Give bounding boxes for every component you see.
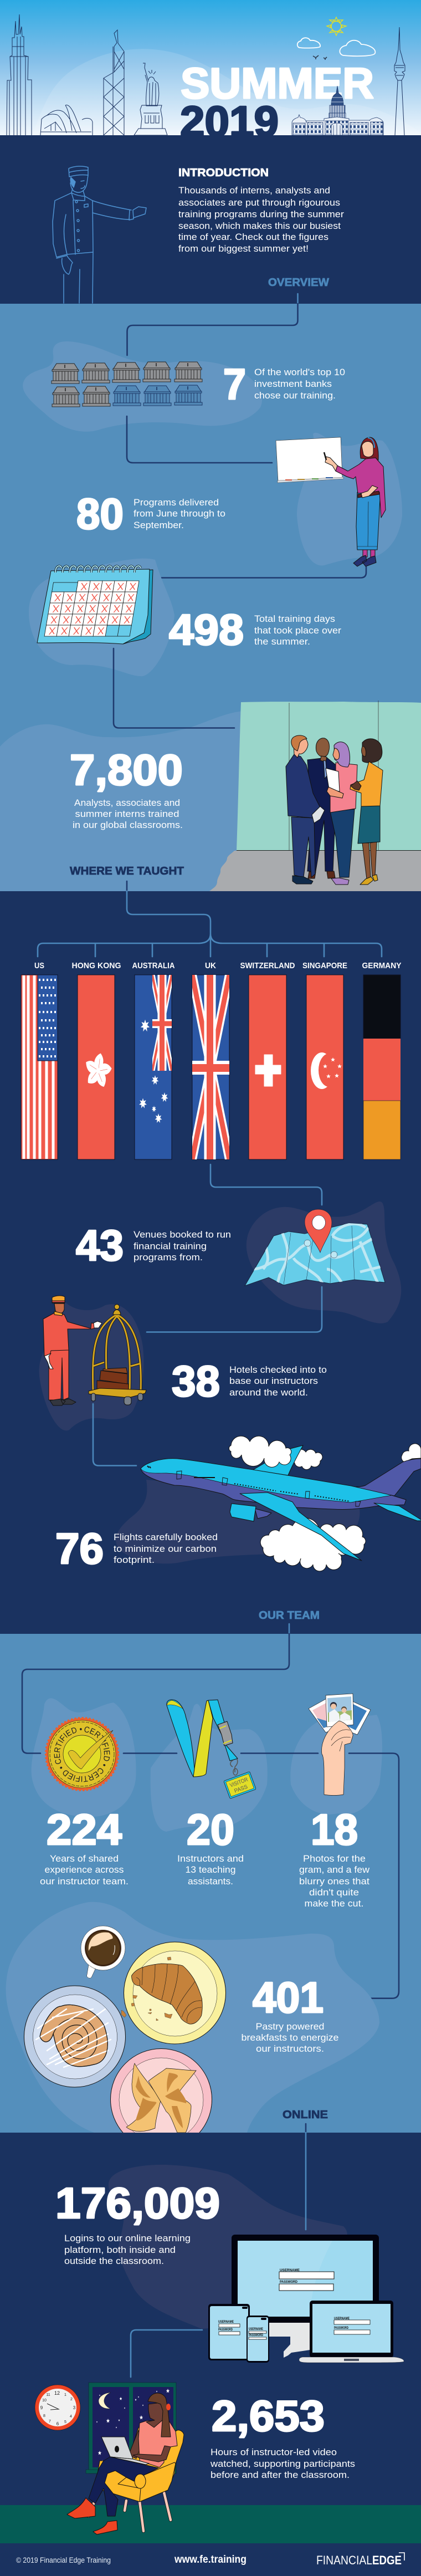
icon: wall clock: 8 bbox=[43, 2414, 45, 2418]
stat: 224 years bbox=[40, 1805, 129, 1887]
stat: 76 flights: 76 bbox=[55, 1524, 104, 1573]
text block: introduction body: associates are put through rigourous bbox=[178, 197, 340, 208]
stat: 7 banks bbox=[223, 360, 345, 408]
stat: 401 breakfasts bbox=[242, 1973, 339, 2054]
blob behind map bbox=[247, 1202, 401, 1323]
cloud behind fin bbox=[294, 1449, 322, 1470]
illustration: bellhop outline bbox=[53, 166, 146, 303]
connector: devices to study scene bbox=[131, 2330, 202, 2377]
stat: 18 photos: blurry ones that bbox=[299, 1876, 369, 1887]
green floor band bbox=[0, 2505, 421, 2543]
laptop logo bbox=[115, 2446, 119, 2452]
stat: 224 years: our instructor team. bbox=[40, 1876, 129, 1887]
stat: 7 banks: investment banks bbox=[254, 379, 332, 389]
student forearm bbox=[133, 2446, 171, 2462]
icon: hand holding photos bbox=[309, 1694, 371, 1796]
icon: clouds outlines bbox=[297, 38, 375, 56]
blob behind bellhop bbox=[39, 1302, 143, 1430]
text block: introduction body: training programs during the summer bbox=[178, 209, 344, 219]
stat: 20 instructors: Instructors and bbox=[177, 1853, 244, 1864]
stat: 38 hotels: around the world. bbox=[229, 1387, 308, 1398]
luggage bbox=[97, 1368, 129, 1393]
blob behind online stat bbox=[109, 2165, 347, 2329]
wing fin bbox=[253, 1445, 303, 1475]
icon: wall clock: 5 bbox=[64, 2420, 66, 2424]
heading: online: ONLINE bbox=[283, 2109, 328, 2121]
stat: 176,009 logins bbox=[55, 2179, 220, 2266]
stat: 7 banks: 7 bbox=[223, 360, 246, 408]
stat: 76 flights: Flights carefully booked bbox=[114, 1532, 218, 1542]
blob behind calendar bbox=[29, 559, 174, 676]
chair arm roll bbox=[135, 2474, 146, 2488]
icon: coffee cup bbox=[81, 1926, 125, 1978]
blob behind teacher bbox=[297, 433, 402, 565]
stat: 7,800 people trained: Analysts, associates and bbox=[74, 798, 180, 808]
stat: 80 programs: September. bbox=[134, 520, 184, 530]
stat: 2,653 hours: 2,653 bbox=[212, 2391, 325, 2440]
footer website: www.fe.training bbox=[174, 2554, 247, 2565]
connector: banks to whiteboard bbox=[127, 416, 272, 463]
stat: 38 hotels: 38 bbox=[172, 1357, 220, 1405]
stat: 7,800 people trained bbox=[70, 745, 183, 830]
stat: 38 hotels: base our instructors bbox=[229, 1376, 318, 1386]
stat: 2,653 hours: watched, supporting participants bbox=[210, 2459, 355, 2469]
icon: lanyard and visitor pass: VISITOR bbox=[229, 1777, 249, 1789]
stat: 18 photos: didn't quite bbox=[309, 1887, 359, 1898]
blobs behind team icons bbox=[32, 1698, 382, 1832]
heading: where we taught: WHERE WE TAUGHT bbox=[70, 865, 184, 877]
tablet left bbox=[208, 2304, 250, 2360]
stat: 176,009 logins: outside the classroom. bbox=[64, 2256, 164, 2266]
country labels: HONG KONG bbox=[72, 961, 121, 970]
icon: Capitol building bbox=[292, 86, 383, 135]
logo: Financial Edge: FINANCIAL bbox=[316, 2553, 372, 2567]
stat: 224 years: Years of shared bbox=[50, 1853, 119, 1864]
icon: birds bbox=[313, 55, 327, 60]
engine nacelle bbox=[230, 1504, 256, 1521]
text block: introduction body bbox=[178, 185, 344, 254]
chair legs fill bbox=[89, 2492, 171, 2531]
stat: 20 instructors bbox=[177, 1805, 244, 1887]
stat: 43 venues bbox=[76, 1221, 231, 1270]
country labels: SINGAPORE bbox=[302, 961, 347, 970]
logo: Financial Edge bbox=[316, 2553, 404, 2567]
tablet left: PASSWORD bbox=[218, 2328, 233, 2332]
person: man in dark suit at back bbox=[307, 738, 336, 878]
stat: 2,653 hours: Hours of instructor-led video bbox=[210, 2447, 337, 2457]
connector: online to devices bbox=[305, 2124, 306, 2230]
illustration: map with pin bbox=[245, 1209, 385, 1286]
icon: wall clock: 7 bbox=[49, 2420, 51, 2424]
icon: certified badge bbox=[45, 1717, 119, 1791]
country labels: US bbox=[34, 961, 44, 970]
stat: 224 years: experience across bbox=[44, 1864, 124, 1875]
stat: 76 flights: to minimize our carbon bbox=[114, 1543, 217, 1554]
stat: 80 programs: Programs delivered bbox=[134, 497, 219, 508]
illustration: airplane with clouds bbox=[141, 1436, 421, 1571]
blob behind plane bbox=[116, 1480, 360, 1563]
icon: wall clock: 6 bbox=[57, 2421, 59, 2426]
icon: certified badge: CERTIFIED • CERTIFIED • CERTIFIED • bbox=[54, 1727, 110, 1782]
icon: night window bbox=[86, 2383, 176, 2473]
footer copyright: © 2019 Financial Edge Training bbox=[16, 2556, 111, 2564]
stat: 20 instructors: 13 teaching bbox=[185, 1864, 236, 1875]
stat: 43 venues: 43 bbox=[76, 1221, 124, 1270]
title: SUMMER: SUMMER bbox=[181, 59, 374, 108]
connector: calendar to classroom bbox=[114, 648, 234, 728]
heading: our team: OUR TEAM bbox=[259, 1609, 320, 1622]
illustration: devices bbox=[208, 2235, 404, 2363]
stat: 76 flights bbox=[55, 1524, 218, 1573]
icon: Munich TV tower bbox=[394, 27, 405, 135]
blob behind pastries bbox=[6, 1902, 379, 2133]
stat: 2,653 hours bbox=[210, 2391, 355, 2480]
connector: flags to map bbox=[210, 1164, 322, 1205]
stat: 498 training days: the summer. bbox=[254, 636, 310, 647]
cart frame bbox=[93, 1315, 141, 1392]
text block: introduction body: season, which makes this our busiest bbox=[178, 221, 341, 231]
icon: wall clock: 11 bbox=[46, 2393, 50, 2397]
country labels: UK bbox=[205, 961, 216, 970]
flag: US bbox=[21, 975, 58, 1159]
country labels bbox=[34, 961, 401, 970]
stat: 401 breakfasts: our instructors. bbox=[256, 2043, 324, 2054]
stat: 401 breakfasts: Pastry powered bbox=[256, 2021, 325, 2032]
laptop lid bbox=[101, 2437, 133, 2459]
laptop: PASSWORD bbox=[334, 2327, 348, 2330]
stat: 7 banks: chose our training. bbox=[254, 390, 336, 401]
stat: 224 years: 224 bbox=[47, 1805, 122, 1854]
stat: 2,653 hours: before and after the classroom. bbox=[210, 2470, 350, 2480]
stat: 498 training days: Total training days bbox=[254, 614, 335, 624]
sneaker right bbox=[93, 2521, 117, 2534]
title: 2019: 2019 bbox=[180, 97, 279, 146]
illustration: calendar bbox=[37, 566, 153, 644]
stat: 498 training days: that took place over bbox=[254, 625, 341, 636]
stat: 18 photos bbox=[299, 1805, 370, 1909]
fuselage lower bbox=[141, 1459, 406, 1509]
phone: USERNAME bbox=[249, 2328, 263, 2331]
tail fin bbox=[351, 1459, 421, 1496]
illustration: teacher bbox=[324, 437, 386, 566]
illustration: classroom scene bbox=[209, 701, 421, 891]
blob behind classroom stat bbox=[0, 711, 244, 891]
laptop: USERNAME bbox=[334, 2317, 350, 2321]
laptop bbox=[299, 2301, 404, 2363]
country labels: AUSTRALIA bbox=[132, 961, 175, 970]
student hair and braid bbox=[148, 2393, 171, 2437]
student face and neck bbox=[146, 2403, 164, 2427]
heading: overview: OVERVIEW bbox=[268, 277, 329, 289]
icon: Bank of China tower bbox=[104, 30, 124, 135]
illustration: whiteboard bbox=[276, 437, 343, 483]
connector: overview to banks bbox=[127, 294, 298, 355]
chair back and seat bbox=[97, 2427, 184, 2502]
top cloud bbox=[229, 1436, 291, 1467]
icon grid: ten banks bbox=[52, 362, 202, 407]
chair arm bbox=[118, 2462, 176, 2502]
stat: 401 breakfasts: breakfasts to energize bbox=[242, 2032, 339, 2043]
stat: 20 instructors: assistants. bbox=[188, 1876, 233, 1887]
tail cloud bbox=[402, 1444, 421, 1462]
stat: 176,009 logins: 176,009 bbox=[55, 2179, 220, 2227]
connector: cart to plane bbox=[93, 1404, 136, 1465]
stat: 20 instructors: 20 bbox=[187, 1805, 234, 1854]
person: woman in orange top bbox=[350, 739, 383, 885]
person: woman in hijab bbox=[326, 742, 357, 885]
flag: UK bbox=[192, 975, 229, 1159]
text block: introduction body: time of year. Check out the figures bbox=[178, 232, 328, 242]
illustration: student on armchair bbox=[67, 2393, 184, 2534]
phone bbox=[247, 2316, 269, 2363]
text block: introduction body: from our biggest summer yet! bbox=[178, 243, 309, 254]
desktop stand bbox=[269, 2323, 310, 2358]
stat: 7,800 people trained: summer interns trained bbox=[75, 809, 179, 819]
stat: 80 programs: from June through to bbox=[134, 508, 225, 519]
student jeans bbox=[89, 2457, 158, 2516]
icon: lanyard and visitor pass: PASS bbox=[233, 1784, 249, 1795]
connector tree: where we taught to flags bbox=[38, 881, 382, 957]
laptop base bbox=[110, 2457, 149, 2465]
country labels: SWITZERLAND bbox=[240, 961, 295, 970]
blob behind banks bbox=[23, 341, 262, 432]
sneaker left bbox=[67, 2498, 95, 2518]
desktop monitor: USERNAME bbox=[280, 2269, 300, 2272]
icon: wall clock: 12 bbox=[54, 2390, 60, 2396]
icon: croissant plate bbox=[121, 1942, 226, 2044]
stat: 18 photos: Photos for the bbox=[303, 1853, 366, 1864]
phone: PASSWORD bbox=[249, 2334, 263, 2337]
icon: wall clock: 10 bbox=[42, 2399, 47, 2403]
flag: Singapore bbox=[306, 975, 343, 1159]
text block: introduction body: Thousands of interns, analysts and bbox=[178, 185, 330, 196]
engine bbox=[255, 1509, 271, 1519]
stat: 38 hotels: Hotels checked into to bbox=[229, 1364, 327, 1375]
stat: 43 venues: financial training bbox=[134, 1241, 207, 1251]
icon: wall clock: 3 bbox=[73, 2405, 76, 2410]
icon: cinnamon roll plate bbox=[24, 1986, 125, 2087]
stat: 498 training days bbox=[169, 605, 341, 654]
stat: 7 banks: Of the world's top 10 bbox=[254, 367, 345, 377]
icon: wall clock bbox=[35, 2385, 80, 2430]
lower cloud bbox=[260, 1518, 366, 1571]
flag: Hong Kong bbox=[78, 975, 115, 1159]
tablet left: USERNAME bbox=[218, 2321, 234, 2324]
desktop monitor: PASSWORD bbox=[280, 2281, 298, 2284]
icon: wall clock: 1 bbox=[64, 2393, 66, 2397]
stat: 18 photos: 18 bbox=[311, 1805, 358, 1854]
icon: lanyard and visitor pass bbox=[167, 1700, 256, 1799]
country labels: GERMANY bbox=[362, 961, 401, 970]
student left arm bbox=[129, 2430, 142, 2459]
person: man in blue suit bbox=[286, 735, 325, 884]
logo: Financial Edge: EDGE bbox=[372, 2553, 402, 2567]
heading: introduction: INTRODUCTION bbox=[178, 167, 269, 179]
stat: 18 photos: gram, and a few bbox=[299, 1864, 370, 1875]
icon: wall clock: 2 bbox=[70, 2398, 73, 2401]
icon: Sydney Opera House bbox=[40, 105, 93, 135]
desktop monitor bbox=[232, 2235, 379, 2323]
flag: Switzerland bbox=[249, 975, 286, 1159]
flag: Germany bbox=[363, 975, 401, 1159]
stat: 43 venues: programs from. bbox=[134, 1252, 203, 1263]
tail wing bbox=[374, 1503, 421, 1521]
chair legs outline bbox=[89, 2492, 171, 2531]
icon: pastry plate bbox=[110, 2048, 212, 2133]
flag: Australia bbox=[135, 975, 172, 1159]
fuselage upper bbox=[141, 1459, 392, 1502]
connector: teacher to calendar bbox=[158, 567, 366, 577]
stat: 76 flights: footprint. bbox=[114, 1555, 155, 1565]
stat: 176,009 logins: platform, both inside and bbox=[64, 2245, 176, 2255]
hair tie bbox=[166, 2404, 171, 2410]
windows and doors bbox=[147, 1466, 361, 1506]
stat: 18 photos: make the cut. bbox=[305, 1898, 363, 1909]
stat: 7,800 people trained: in our global classrooms. bbox=[73, 820, 183, 830]
stat: 38 hotels bbox=[172, 1357, 327, 1405]
header sky with skyline and title bbox=[0, 0, 421, 146]
icon: Statue of Liberty bbox=[134, 63, 167, 135]
stat: 80 programs: 80 bbox=[76, 489, 124, 538]
icon: wall clock: 4 bbox=[70, 2415, 72, 2419]
icon: Burj Khalifa tower bbox=[7, 14, 32, 135]
stat: 7,800 people trained: 7,800 bbox=[70, 745, 183, 794]
connector: map to hotel cart bbox=[147, 1287, 322, 1332]
stat: 176,009 logins: Logins to our online learning bbox=[64, 2233, 191, 2243]
stat: 401 breakfasts: 401 bbox=[253, 1973, 324, 2022]
main wing bbox=[240, 1493, 362, 1561]
icon: wall clock: 9 bbox=[40, 2405, 43, 2410]
student shirt bbox=[138, 2420, 177, 2467]
stat: 80 programs bbox=[76, 489, 225, 538]
icon: sun bbox=[327, 17, 346, 35]
connector: our team through icons bbox=[22, 1624, 399, 1999]
stat: 498 training days: 498 bbox=[169, 605, 244, 654]
bellhop figure bbox=[43, 1296, 102, 1405]
stat: 43 venues: Venues booked to run bbox=[134, 1229, 231, 1240]
illustration: bellhop and luggage cart bbox=[43, 1296, 146, 1405]
